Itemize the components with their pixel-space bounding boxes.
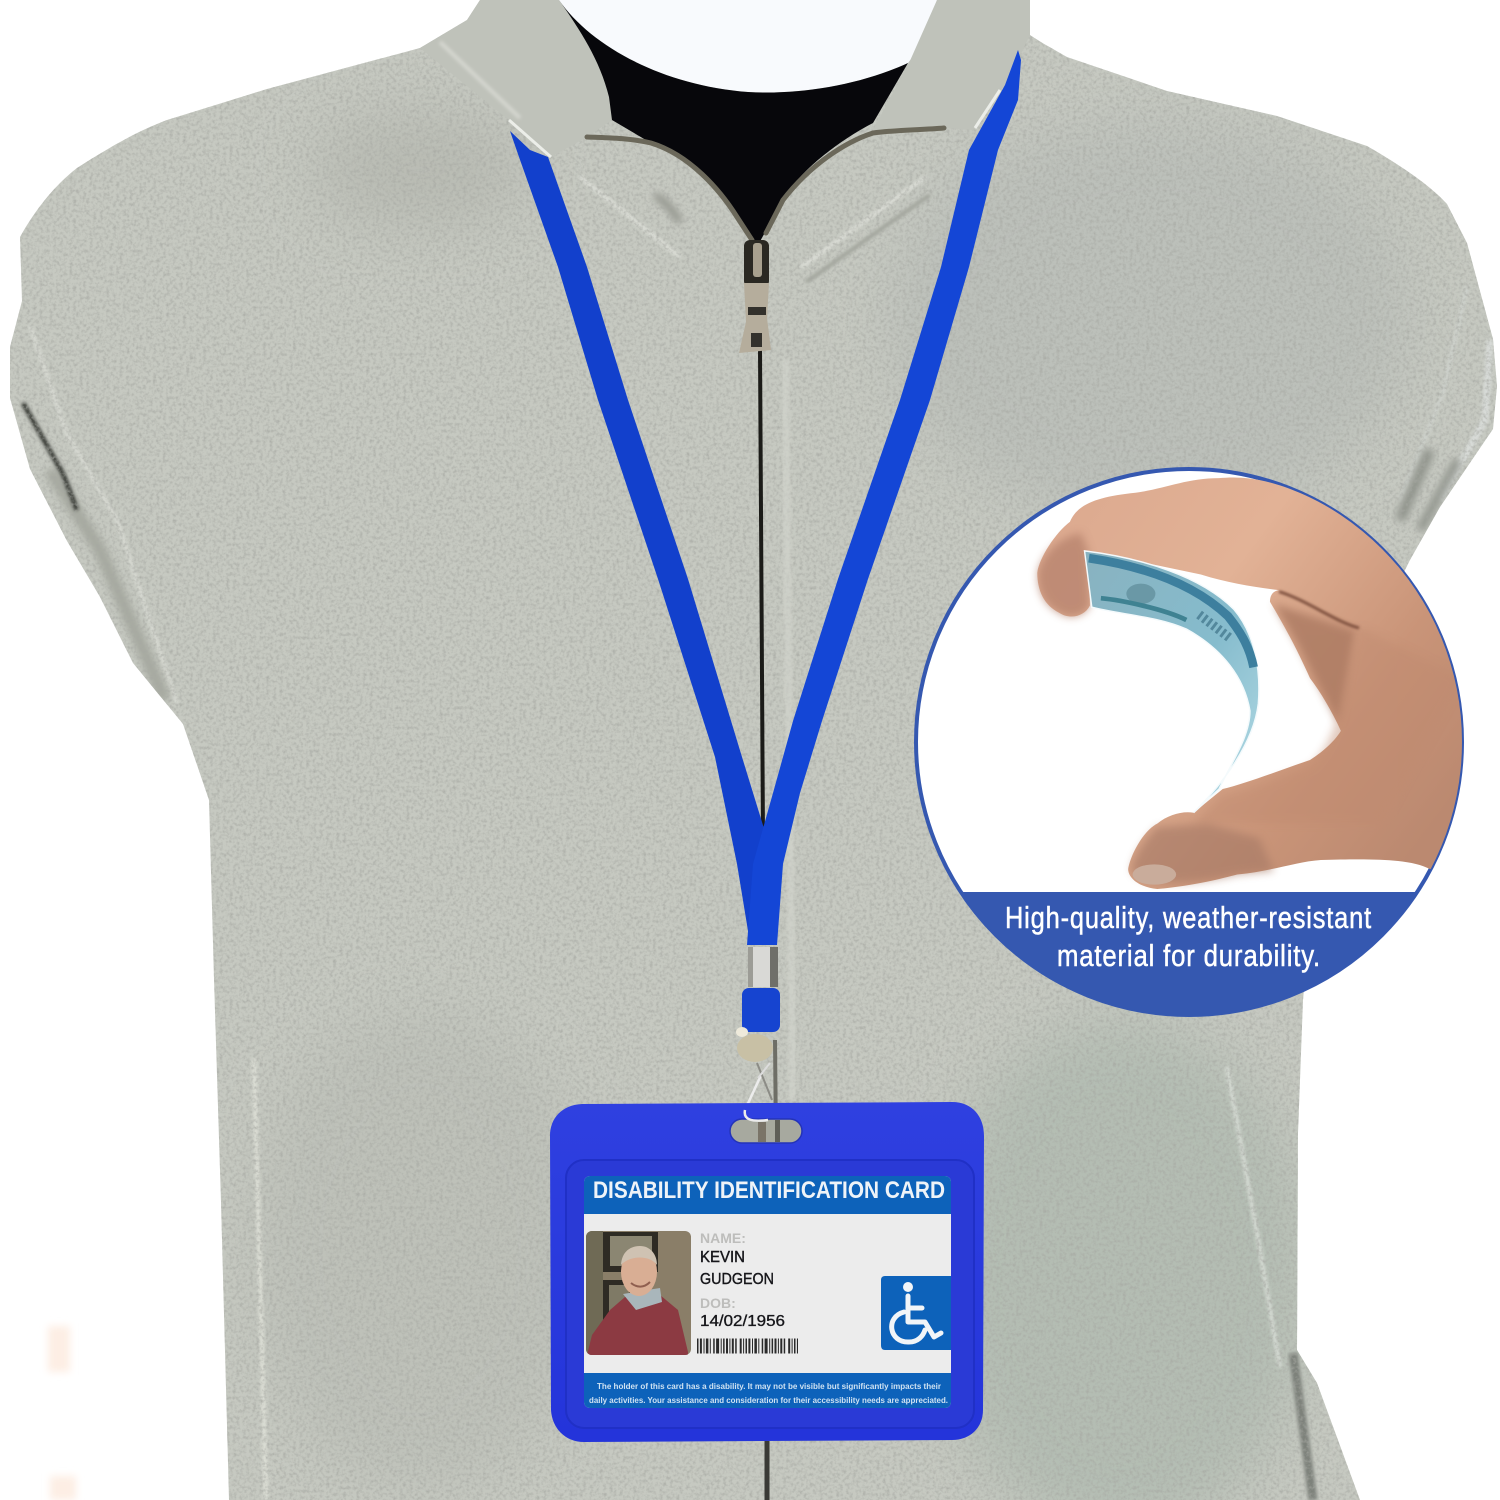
folded finger shade (1274, 604, 1355, 724)
faint background smudges (48, 1326, 76, 1500)
card white body (584, 1176, 951, 1408)
name value line one: KEVIN (700, 1249, 745, 1266)
name value line two: GUDGEON (700, 1271, 774, 1288)
name label: NAME: (700, 1230, 746, 1246)
icon: wheelchair symbol (881, 1276, 951, 1350)
thumb shade (1132, 824, 1274, 883)
portrait photo (586, 1231, 691, 1355)
zipper pull (739, 240, 771, 353)
card miniature portrait (1126, 584, 1155, 604)
neck opening (559, 0, 937, 93)
card miniature shoulders (1101, 598, 1186, 620)
chest folds (580, 177, 680, 257)
caption text: material for durability. (1057, 938, 1321, 973)
callout: flexible card durability (916, 469, 1478, 1015)
black t-shirt (559, 0, 908, 245)
lanyard left strap (510, 131, 766, 943)
swivel hook (736, 1027, 773, 1110)
card disclaimer text (589, 1381, 948, 1405)
date of birth label: DOB: (700, 1295, 736, 1311)
hand bending card (1037, 477, 1478, 889)
ID card holder (550, 1102, 984, 1442)
zipper placket (733, 350, 793, 1500)
bent card (1085, 551, 1259, 813)
card footer band (584, 1373, 951, 1408)
lanyard right strap (747, 50, 1021, 945)
left slit (23, 403, 77, 510)
collar (420, 0, 1030, 157)
hand (1037, 477, 1478, 889)
card header band (584, 1176, 951, 1214)
holder body (550, 1102, 984, 1442)
card stripe (1089, 558, 1254, 667)
hanging slot (730, 1119, 802, 1143)
body side seams (254, 1059, 266, 1500)
card miniature text (1199, 615, 1230, 638)
inner rim (566, 1160, 974, 1428)
palm shade (1212, 675, 1456, 816)
caption band (961, 892, 1417, 1015)
blue lanyard (510, 50, 1021, 945)
callout disc (916, 469, 1462, 1015)
zipper teeth (587, 128, 944, 240)
caption text (1005, 900, 1372, 973)
fingertip shade (1038, 533, 1090, 616)
card title: DISABILITY IDENTIFICATION CARD (593, 1177, 945, 1204)
lanyard metal crimp (742, 947, 780, 1032)
thumbnail (1133, 864, 1176, 885)
wire through slot (745, 1110, 768, 1121)
card disclaimer text: daily activities. Your assistance and consideration for their accessibility needs are appreciated. (589, 1395, 948, 1405)
sleeve seams (30, 326, 177, 704)
finger crease (1279, 592, 1359, 628)
zip visible through slot (758, 1120, 780, 1142)
card disclaimer text: The holder of this card has a disability. It may not be visible but significantly impacts their (597, 1381, 942, 1391)
caption text: High-quality, weather-resistant (1005, 900, 1372, 935)
date of birth value: 14/02/1956 (700, 1313, 785, 1330)
card insert (584, 1176, 951, 1408)
barcode (697, 1338, 798, 1354)
